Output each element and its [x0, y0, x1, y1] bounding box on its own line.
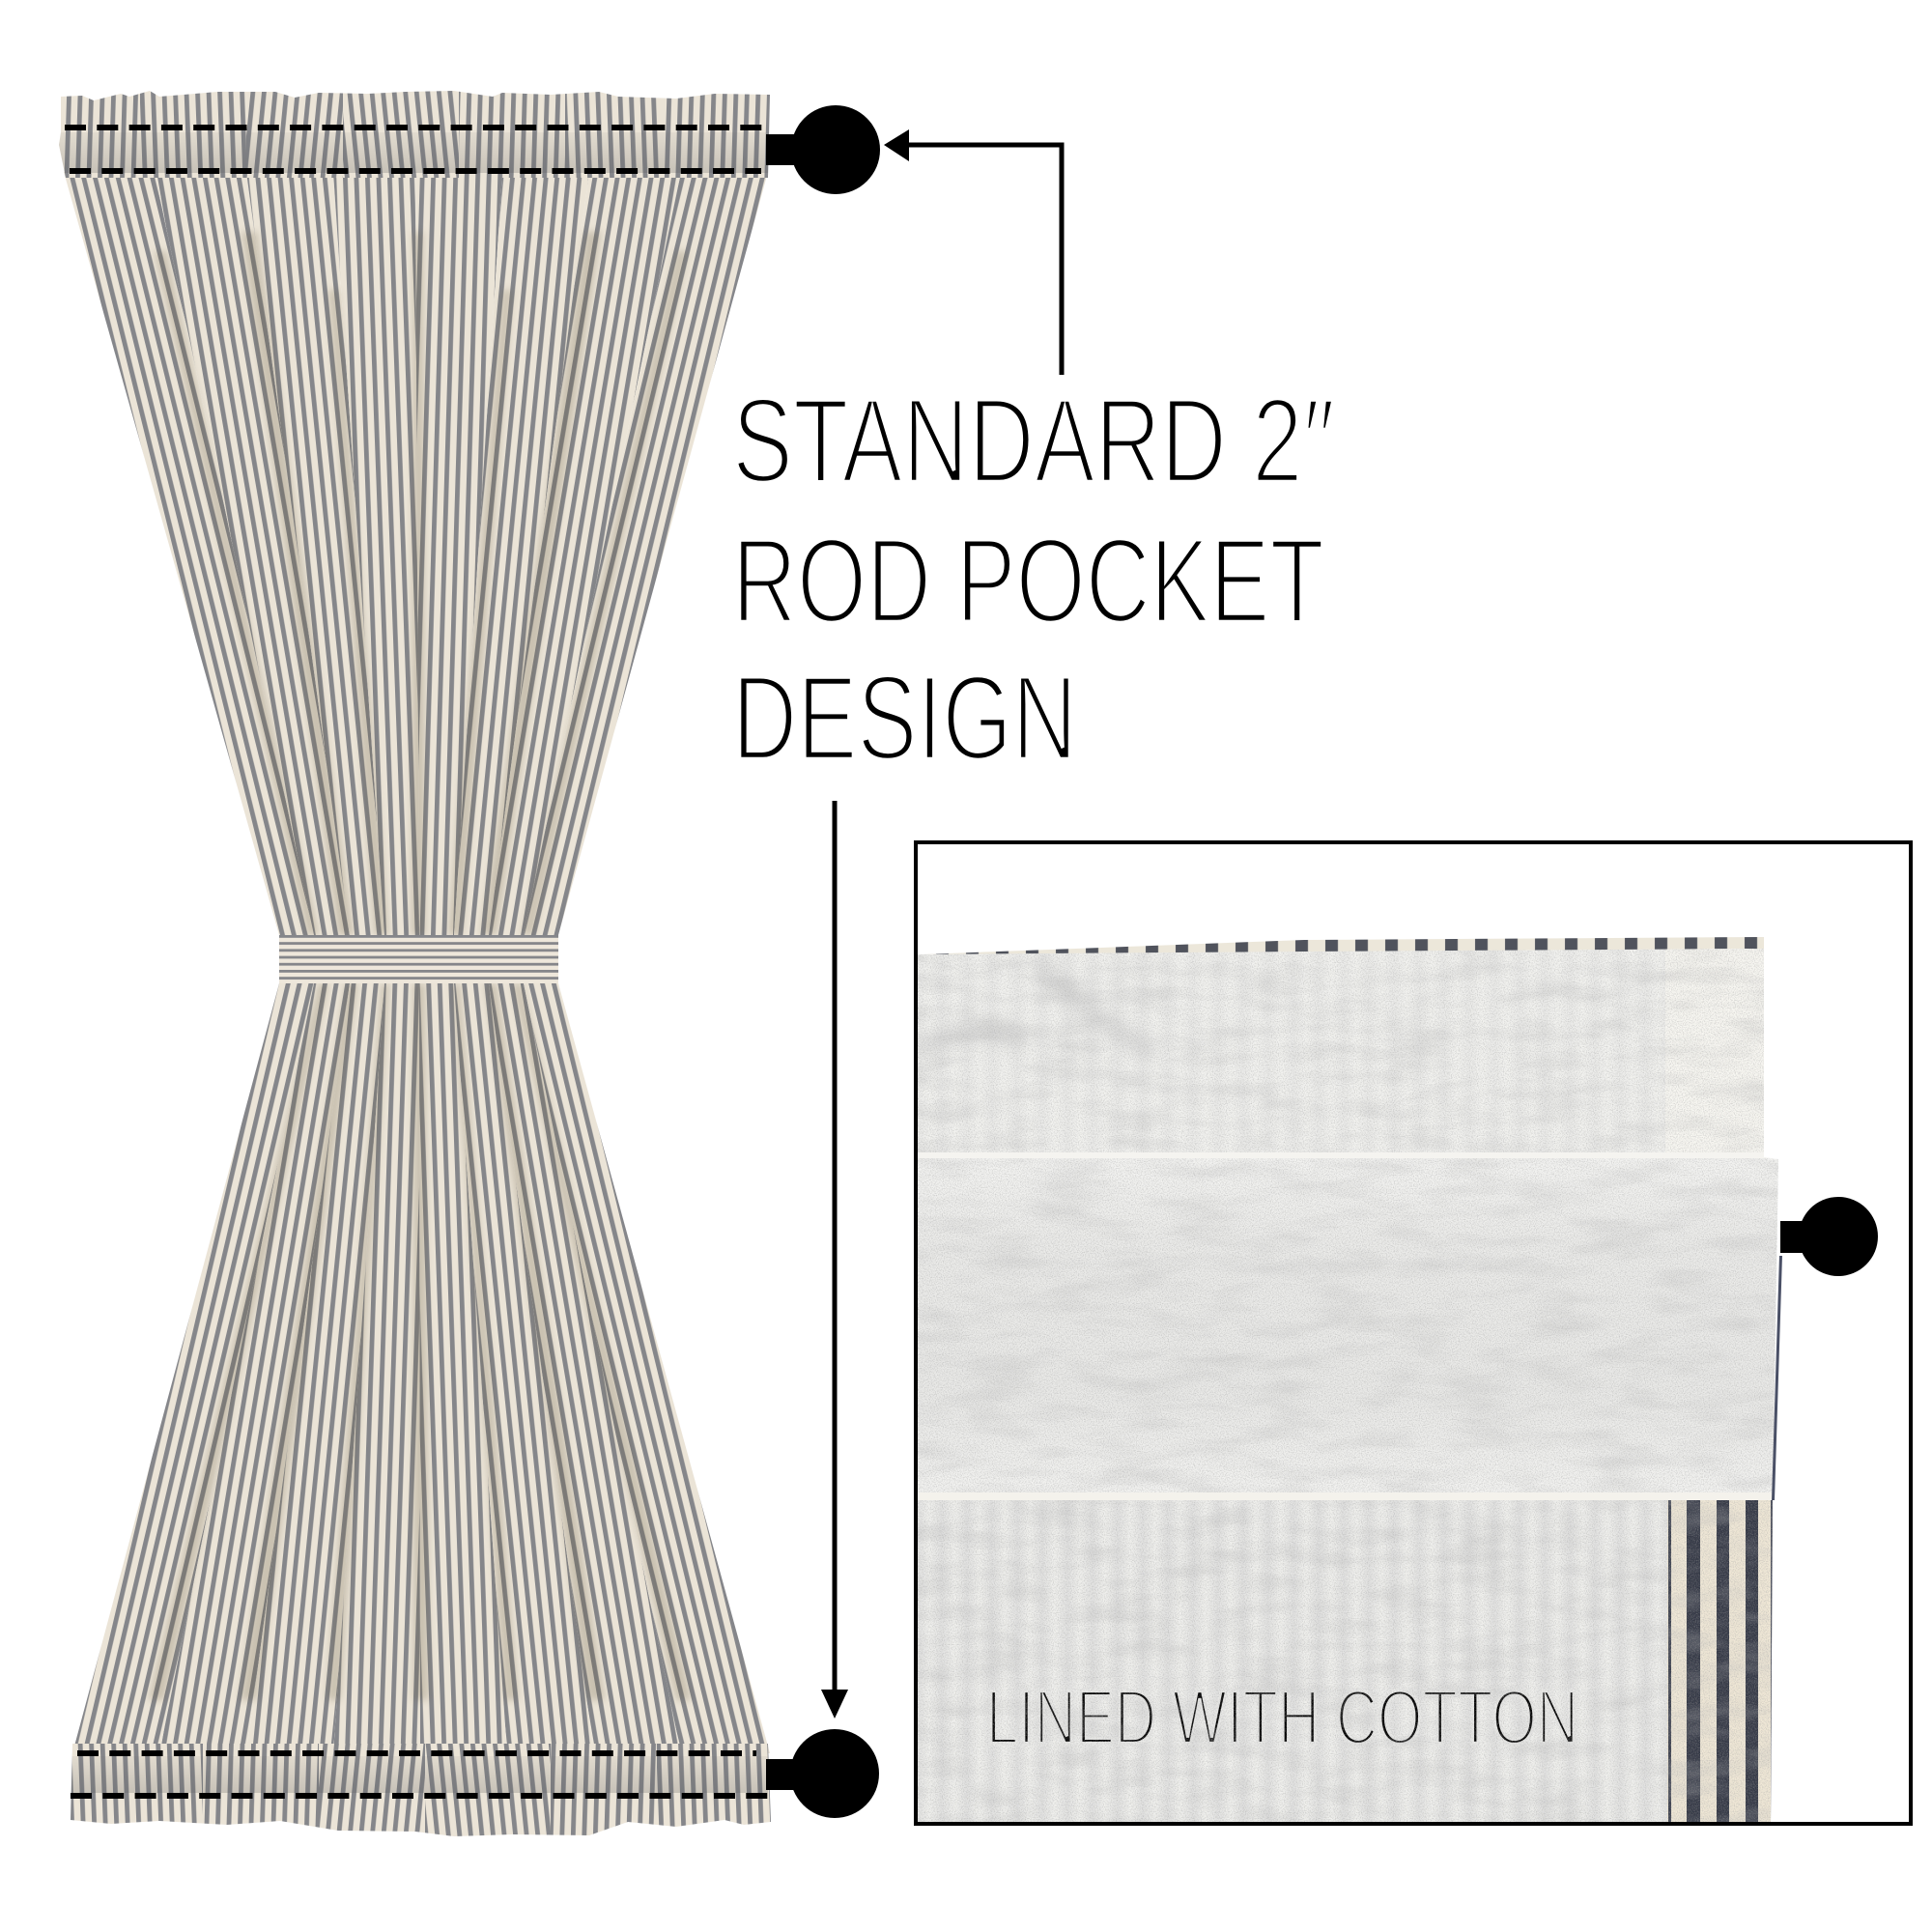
woven fabric texture	[918, 937, 1782, 1824]
lining lower layer	[918, 1500, 1669, 1824]
arrow: text to bottom rod	[821, 801, 848, 1719]
lining folded corner	[1665, 949, 1756, 1152]
panel: lining detail	[916, 842, 1911, 1824]
icon: top curtain rod	[766, 105, 880, 194]
heading: rod pocket callout	[732, 375, 1335, 785]
ticking stripe strip	[1667, 1500, 1774, 1824]
heading: rod pocket callout: STANDARD 2″	[732, 375, 1335, 508]
pocket band top seam	[918, 1152, 1777, 1158]
pocket band bottom seam	[918, 1492, 1774, 1500]
frame	[916, 842, 1911, 1824]
mottled fabric shading	[918, 937, 1782, 1824]
lining pocket band	[918, 1154, 1782, 1500]
icon: bottom curtain rod	[766, 1729, 879, 1818]
lining upper layer	[918, 949, 1764, 1157]
heading: rod pocket callout: DESIGN	[732, 652, 1077, 785]
lining fold shadow	[918, 961, 1154, 1053]
stitch lines: bottom rod pocket	[71, 1753, 768, 1796]
heading: rod pocket callout: ROD POCKET	[732, 515, 1324, 648]
stitch lines: top rod pocket	[65, 128, 763, 171]
label: lined with cotton: LINED WITH COTTON	[986, 1674, 1578, 1760]
tieback band	[279, 935, 558, 983]
checked top fabric edge	[923, 937, 1764, 958]
navy edge behind band	[1772, 1256, 1782, 1500]
curtain panel	[53, 87, 773, 1840]
curtain lower section	[72, 983, 770, 1753]
curtain upper section	[64, 172, 768, 935]
top rod pocket header	[53, 87, 773, 179]
lining fabric layers	[918, 937, 1782, 1824]
icon: inset curtain rod	[1780, 1197, 1878, 1276]
arrow: text to top rod	[884, 129, 1062, 375]
bottom rod pocket header	[68, 1739, 773, 1840]
